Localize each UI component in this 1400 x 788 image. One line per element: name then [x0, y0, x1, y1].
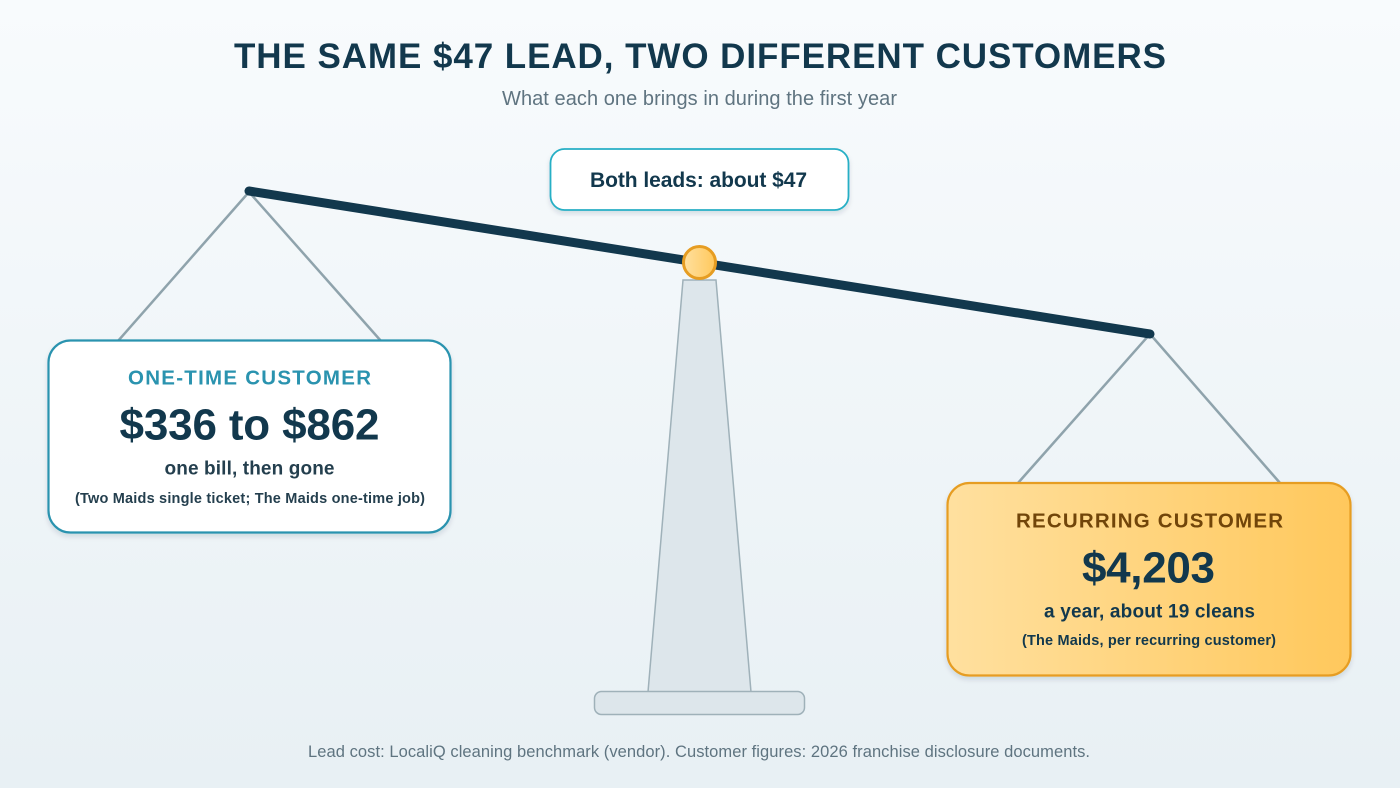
- one-time value: $336 to $862: [120, 400, 380, 450]
- left hanging cords: [118, 192, 381, 341]
- recurring source: (The Maids, per recurring customer): [1022, 633, 1276, 649]
- pivot: [684, 246, 716, 278]
- recurring heading: RECURRING CUSTOMER: [1016, 510, 1283, 532]
- one-time heading: ONE-TIME CUSTOMER: [128, 366, 371, 390]
- panel: recurring customer: [948, 483, 1350, 676]
- title: THE SAME $47 LEAD, TWO DIFFERENT CUSTOMERS: [234, 37, 1166, 76]
- right hanging cords: [1018, 334, 1280, 483]
- scale beam: [249, 191, 1150, 334]
- callout: both leads: [550, 149, 848, 210]
- recurring value: $4,203: [1082, 544, 1215, 592]
- callout: both leads: Both leads: about $47: [590, 169, 807, 192]
- panel: one-time customer: [48, 340, 450, 532]
- recurring description: a year, about 19 cleans: [1044, 602, 1255, 622]
- scale stand: [594, 280, 804, 714]
- one-time source: (Two Maids single ticket; The Maids one-time job): [75, 491, 425, 507]
- footnote: Lead cost: LocaliQ cleaning benchmark (vendor). Customer figures: 2026 franchise disclosure documents.: [308, 743, 1090, 761]
- subtitle: What each one brings in during the first year: [502, 88, 897, 110]
- one-time description: one bill, then gone: [164, 458, 334, 480]
